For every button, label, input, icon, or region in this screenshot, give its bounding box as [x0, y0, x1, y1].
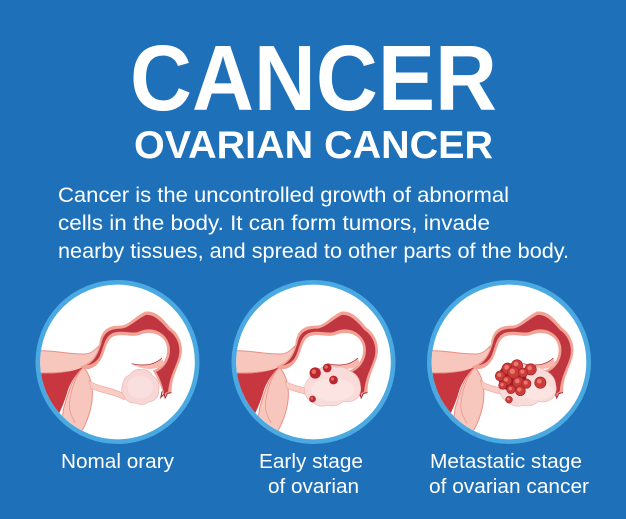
- description text: [58, 184, 569, 263]
- panel: metastatic stage: [428, 282, 589, 442]
- description text: Cancer is the uncontrolled growth of abnormal: [58, 184, 509, 207]
- label: early stage: Early stage: [259, 451, 363, 473]
- icon: ovary with tumor cluster: [495, 360, 556, 406]
- label: metastatic stage: [429, 451, 589, 498]
- label: normal ovary: Nomal orary: [61, 451, 174, 473]
- panel: normal ovary: [37, 282, 197, 442]
- label: metastatic stage: of ovarian cancer: [429, 476, 589, 498]
- description text: nearby tissues, and spread to other parts of the body.: [58, 240, 569, 263]
- icon: healthy ovary: [122, 369, 159, 405]
- icon: ovary with small tumors: [304, 364, 361, 406]
- label: early stage: [259, 451, 363, 498]
- title: CANCER: [130, 26, 497, 130]
- label: metastatic stage: Metastatic stage: [430, 451, 582, 473]
- description text: cells in the body. It can form tumors, invade: [58, 212, 490, 235]
- panel: early stage: [233, 282, 393, 442]
- label: early stage: of ovarian: [268, 476, 359, 498]
- subtitle: OVARIAN CANCER: [134, 124, 493, 167]
